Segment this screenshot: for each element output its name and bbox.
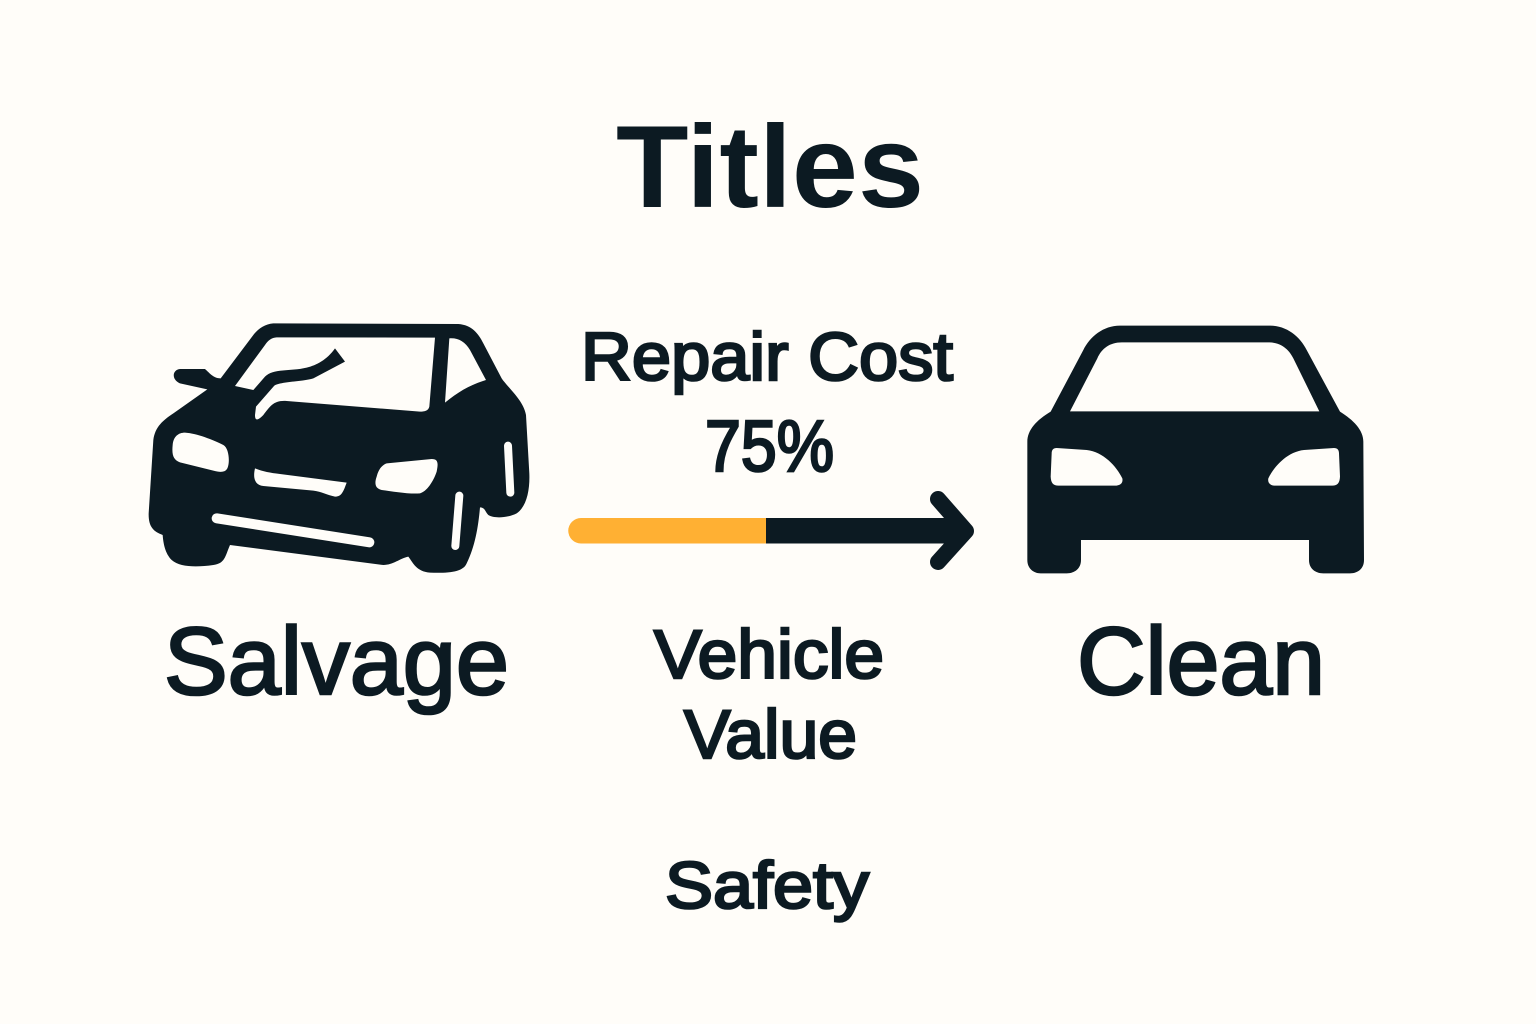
- label: Vehicle Value: [654, 616, 884, 773]
- icon: damaged salvage car: [149, 323, 529, 573]
- label: Safety: Safety: [665, 848, 869, 922]
- progress arrow at 75%: [568, 499, 966, 562]
- label: Repair Cost: Repair Cost: [581, 319, 953, 395]
- value: 75%: 75%: [705, 407, 834, 487]
- label: Salvage: Salvage: [164, 608, 509, 715]
- label: Vehicle Value: Value: [684, 696, 857, 773]
- icon: clean car: [1027, 326, 1364, 573]
- label: Vehicle Value: Vehicle: [654, 616, 884, 693]
- title: Titles: [616, 101, 924, 232]
- label: Clean: Clean: [1077, 608, 1325, 715]
